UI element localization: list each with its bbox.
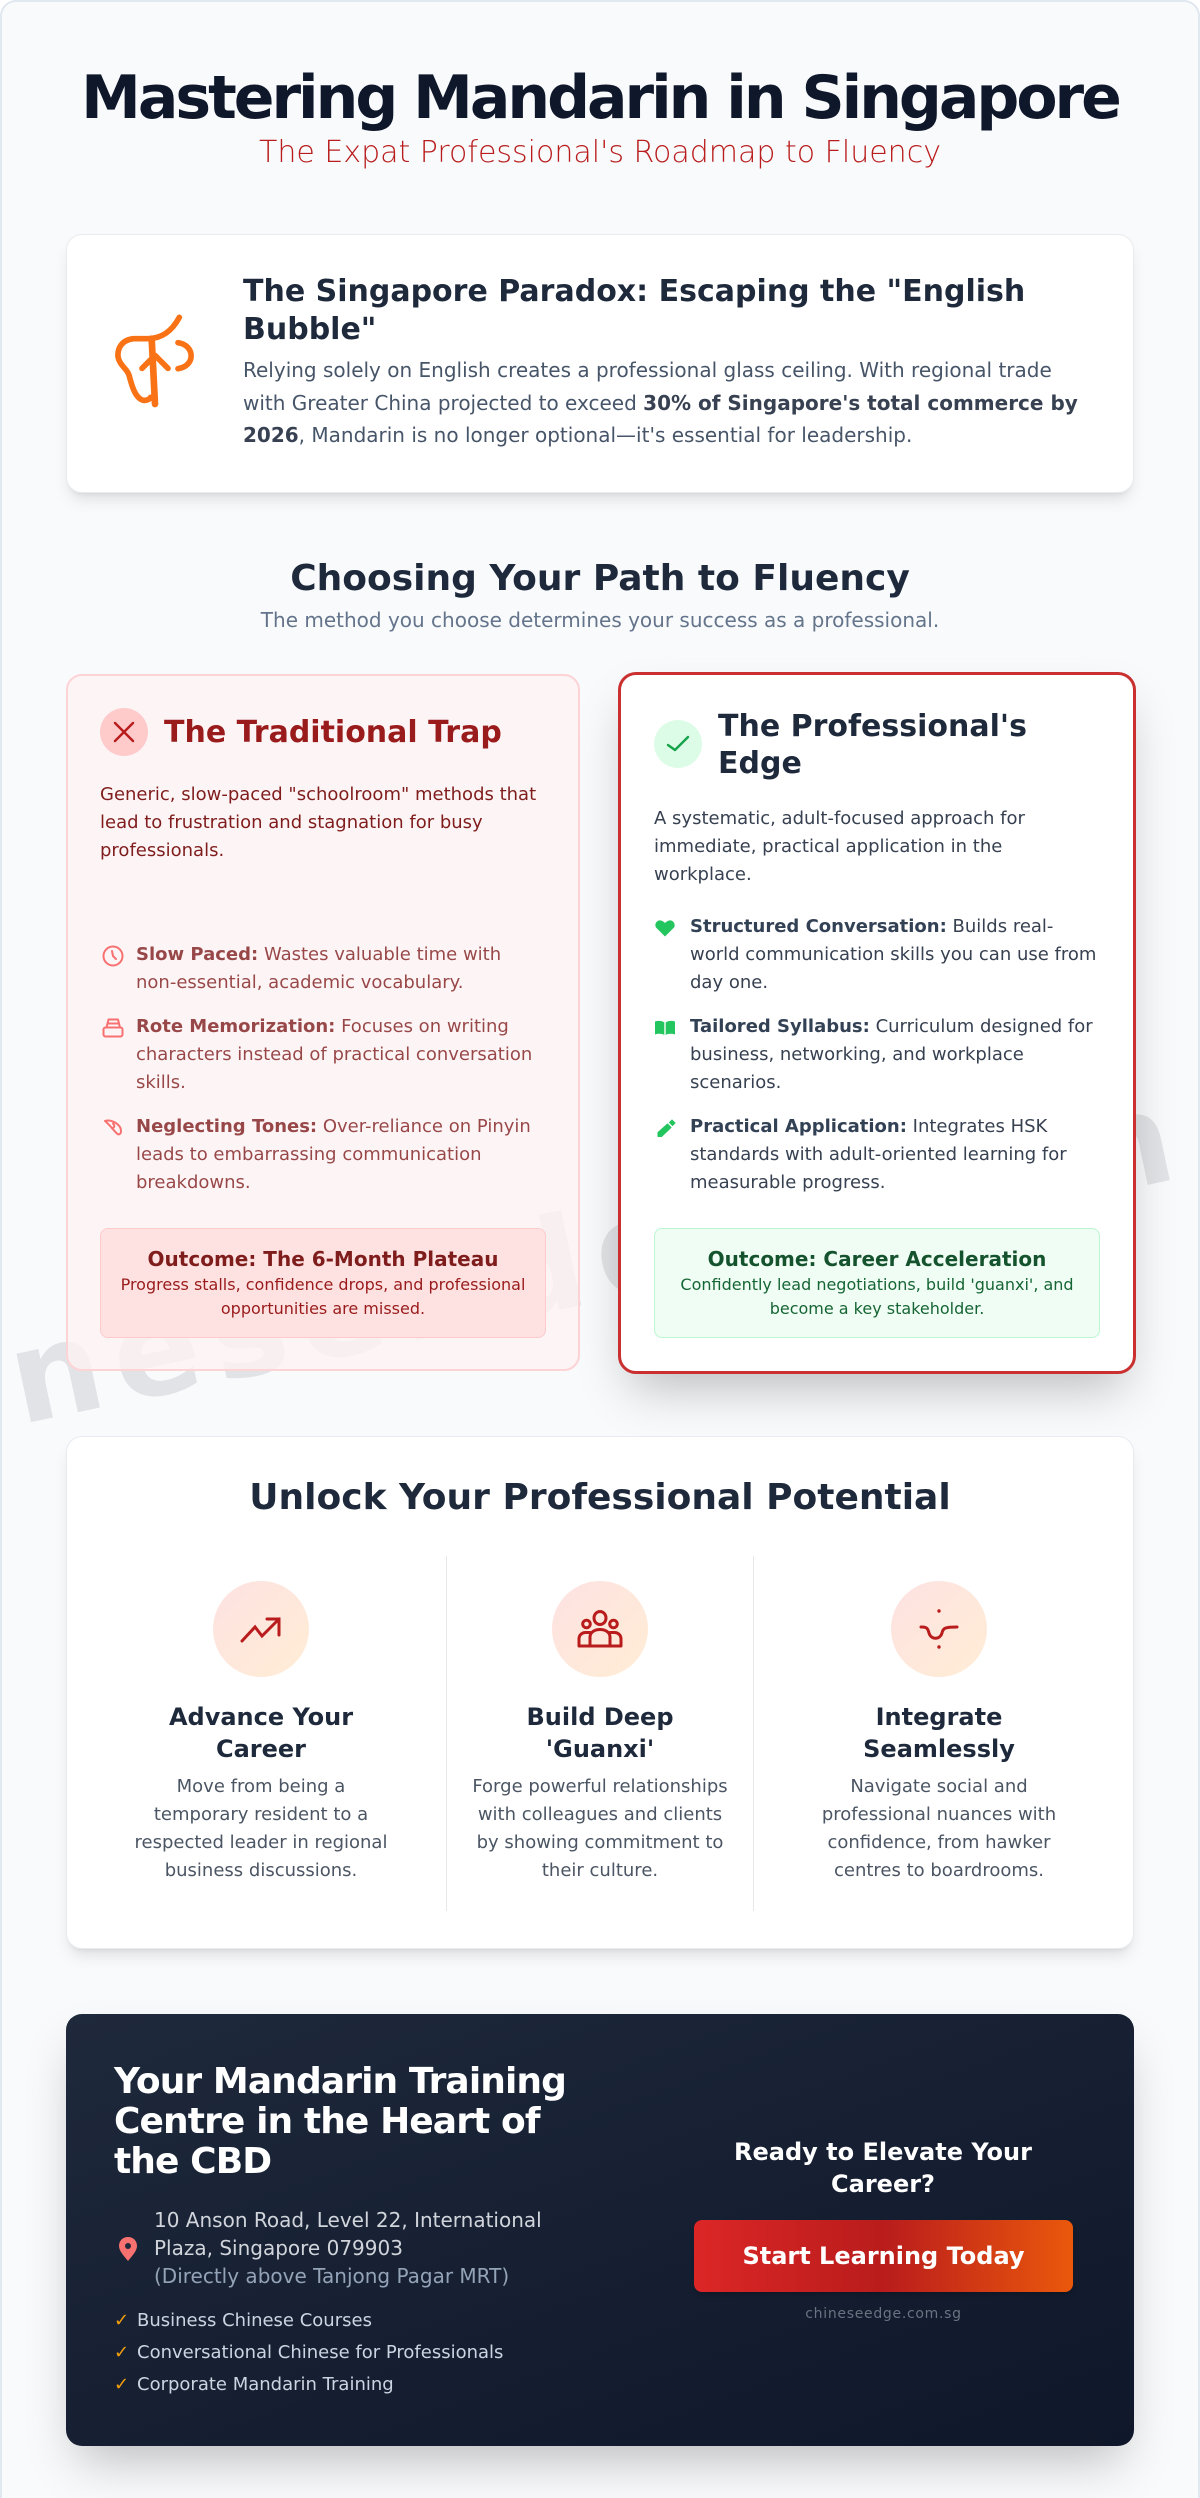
icon: stacked books	[102, 1018, 124, 1038]
icon: muted tone	[104, 1120, 122, 1136]
benefit text: Move from being a	[177, 1776, 345, 1797]
item: rote memorization: characters instead of practical conversation	[136, 1044, 532, 1065]
benefit text: with colleagues and clients	[478, 1804, 722, 1825]
benefit text: centres to boardrooms.	[834, 1860, 1044, 1881]
benefit title: Integrate	[876, 1703, 1002, 1731]
benefit text	[135, 1776, 387, 1881]
outcome: plateau	[100, 1228, 546, 1338]
icon: check	[654, 720, 702, 768]
outcome text: opportunities are missed.	[221, 1299, 425, 1318]
outcome title: Outcome: Career Acceleration	[708, 1247, 1046, 1271]
benefit text: by showing commitment to	[477, 1832, 723, 1853]
item: rote memorization: Rote Memorization: Focuses on writing	[136, 1016, 509, 1037]
benefit title: Build Deep	[526, 1703, 674, 1731]
trap description: professionals.	[100, 840, 224, 861]
cta heading	[114, 2061, 566, 2182]
cta heading: Centre in the Heart of	[114, 2101, 540, 2142]
column: advance your career	[67, 1556, 447, 1911]
outcome text	[121, 1275, 525, 1318]
item: slow paced: non-essential, academic vocabulary.	[136, 972, 463, 993]
item: tailored syllabus: scenarios.	[690, 1072, 781, 1093]
outcome title: Outcome: The 6-Month Plateau	[148, 1247, 498, 1271]
course list: Conversational Chinese for Professionals	[137, 2342, 503, 2363]
benefit text: respected leader in regional	[135, 1832, 387, 1853]
address: 10 Anson Road, Level 22, International	[154, 2208, 542, 2232]
item: tailored syllabus: Tailored Syllabus: Curriculum designed for	[690, 1016, 1093, 1037]
cta button	[694, 2220, 1073, 2292]
item: neglecting tones	[136, 1116, 531, 1193]
item: structured conversation: Structured Conversation: Builds real-	[690, 916, 1053, 937]
item: practical application: measurable progress.	[690, 1172, 886, 1193]
trap description: Generic, slow-paced "schoolroom" methods that	[100, 784, 536, 805]
item: slow paced	[136, 944, 501, 993]
trap description: lead to frustration and stagnation for busy	[100, 812, 483, 833]
section subheading: The method you choose determines your success as a professional.	[261, 608, 939, 632]
course list: ✓	[114, 2310, 129, 2331]
panel: call to action	[66, 2014, 1134, 2446]
section heading: Choosing Your Path to Fluency	[290, 558, 910, 599]
cta question: Ready to Elevate Your	[734, 2138, 1032, 2166]
item: structured conversation: world communication skills you can use from	[690, 944, 1096, 965]
edge description	[654, 808, 1025, 885]
benefit text: confidence, from hawker	[827, 1832, 1050, 1853]
icon: pencil	[658, 1120, 676, 1137]
trap heading: The Traditional Trap	[164, 715, 502, 750]
benefit title: Seamlessly	[863, 1735, 1015, 1763]
edge heading: The Professional's	[718, 709, 1027, 744]
icon: clock	[102, 946, 124, 966]
panel: professional potential	[66, 1436, 1134, 1949]
icon: open book	[655, 1020, 675, 1035]
benefit text	[472, 1776, 728, 1881]
subtitle: The Expat Professional's Roadmap to Fluency	[259, 135, 941, 170]
cta question	[734, 2138, 1032, 2198]
icon: cross	[100, 708, 148, 756]
paradox text: 2026, Mandarin is no longer optional—it's essential for leadership.	[243, 423, 912, 447]
column: build deep guanxi	[447, 1556, 754, 1911]
benefit title: Career	[216, 1735, 306, 1763]
icon: map pin	[119, 2237, 137, 2261]
item: neglecting tones: breakdowns.	[136, 1172, 251, 1193]
benefit text: professional nuances with	[822, 1804, 1056, 1825]
outcome text	[680, 1275, 1074, 1318]
outcome text: Progress stalls, confidence drops, and professional	[121, 1275, 525, 1294]
benefit title: Advance Your	[169, 1703, 353, 1731]
benefit title	[169, 1703, 353, 1763]
address: Plaza, Singapore 079903	[154, 2236, 403, 2260]
course list: Business Chinese Courses	[137, 2310, 372, 2331]
item: practical application: Practical Application: Integrates HSK	[690, 1116, 1047, 1137]
item: neglecting tones: Neglecting Tones: Over-reliance on Pinyin	[136, 1116, 531, 1137]
trap description	[100, 784, 536, 861]
benefit title: 'Guanxi'	[546, 1735, 654, 1763]
outcome text: Confidently lead negotiations, build 'guanxi', and	[680, 1275, 1074, 1294]
icon: people	[552, 1581, 648, 1677]
address	[154, 2208, 542, 2288]
edge description: workplace.	[654, 864, 752, 885]
cta button: Start Learning Today	[742, 2242, 1025, 2270]
cta heading: Your Mandarin Training	[114, 2061, 566, 2102]
paradox text: with Greater China projected to exceed 30% of Singapore's total commerce by	[243, 390, 1078, 414]
paradox heading	[243, 274, 1025, 346]
outcome: career acceleration	[654, 1228, 1100, 1338]
icon: heart	[655, 920, 675, 936]
icon: trending up	[213, 1581, 309, 1677]
item: practical application: standards with adult-oriented learning for	[690, 1144, 1067, 1165]
edge description: A systematic, adult-focused approach for	[654, 808, 1025, 829]
benefit title	[863, 1703, 1015, 1763]
item: tailored syllabus: business, networking, and workplace	[690, 1044, 1024, 1065]
item: neglecting tones: leads to embarrassing communication	[136, 1144, 482, 1165]
benefit text	[822, 1776, 1056, 1881]
benefit title	[526, 1703, 674, 1763]
item: structured conversation	[690, 916, 1096, 993]
benefits heading: Unlock Your Professional Potential	[249, 1477, 951, 1518]
course list	[114, 2310, 503, 2395]
benefit text: temporary resident to a	[154, 1804, 368, 1825]
edge heading: Edge	[718, 746, 802, 781]
panel: professional's edge	[618, 672, 1136, 1374]
panel: singapore paradox	[66, 234, 1134, 493]
item: tailored syllabus	[690, 1016, 1093, 1093]
item: rote memorization	[136, 1016, 532, 1093]
course list: ✓	[114, 2374, 129, 2395]
column: integrate seamlessly	[822, 1581, 1056, 1881]
paradox heading: The Singapore Paradox: Escaping the "English	[243, 274, 1025, 309]
benefit text: Forge powerful relationships	[472, 1776, 728, 1797]
paradox text	[243, 358, 1078, 447]
item: slow paced: Slow Paced: Wastes valuable time with	[136, 944, 501, 965]
cta question: Career?	[831, 2170, 935, 2198]
item: structured conversation: day one.	[690, 972, 768, 993]
item: practical application	[690, 1116, 1067, 1193]
edge heading	[718, 709, 1027, 781]
outcome text: become a key stakeholder.	[770, 1299, 984, 1318]
paradox text: Relying solely on English creates a professional glass ceiling. With regional trade	[243, 358, 1052, 382]
item: rote memorization: skills.	[136, 1072, 186, 1093]
icon: tone curve	[891, 1581, 987, 1677]
icon: speaking head with arrow	[115, 314, 194, 408]
cta heading: the CBD	[114, 2141, 271, 2182]
title: Mastering Mandarin in Singapore	[81, 63, 1119, 133]
website: chineseedge.com.sg	[805, 2306, 962, 2322]
paradox heading: Bubble"	[243, 312, 376, 346]
benefit text: their culture.	[542, 1860, 658, 1881]
course list: Corporate Mandarin Training	[137, 2374, 394, 2395]
course list: ✓	[114, 2342, 129, 2363]
benefit text: Navigate social and	[850, 1776, 1028, 1797]
benefit text: business discussions.	[165, 1860, 357, 1881]
address: (Directly above Tanjong Pagar MRT)	[154, 2264, 509, 2288]
edge description: immediate, practical application in the	[654, 836, 1002, 857]
gradient defs	[66, 1436, 68, 1438]
panel: traditional trap	[66, 674, 580, 1371]
